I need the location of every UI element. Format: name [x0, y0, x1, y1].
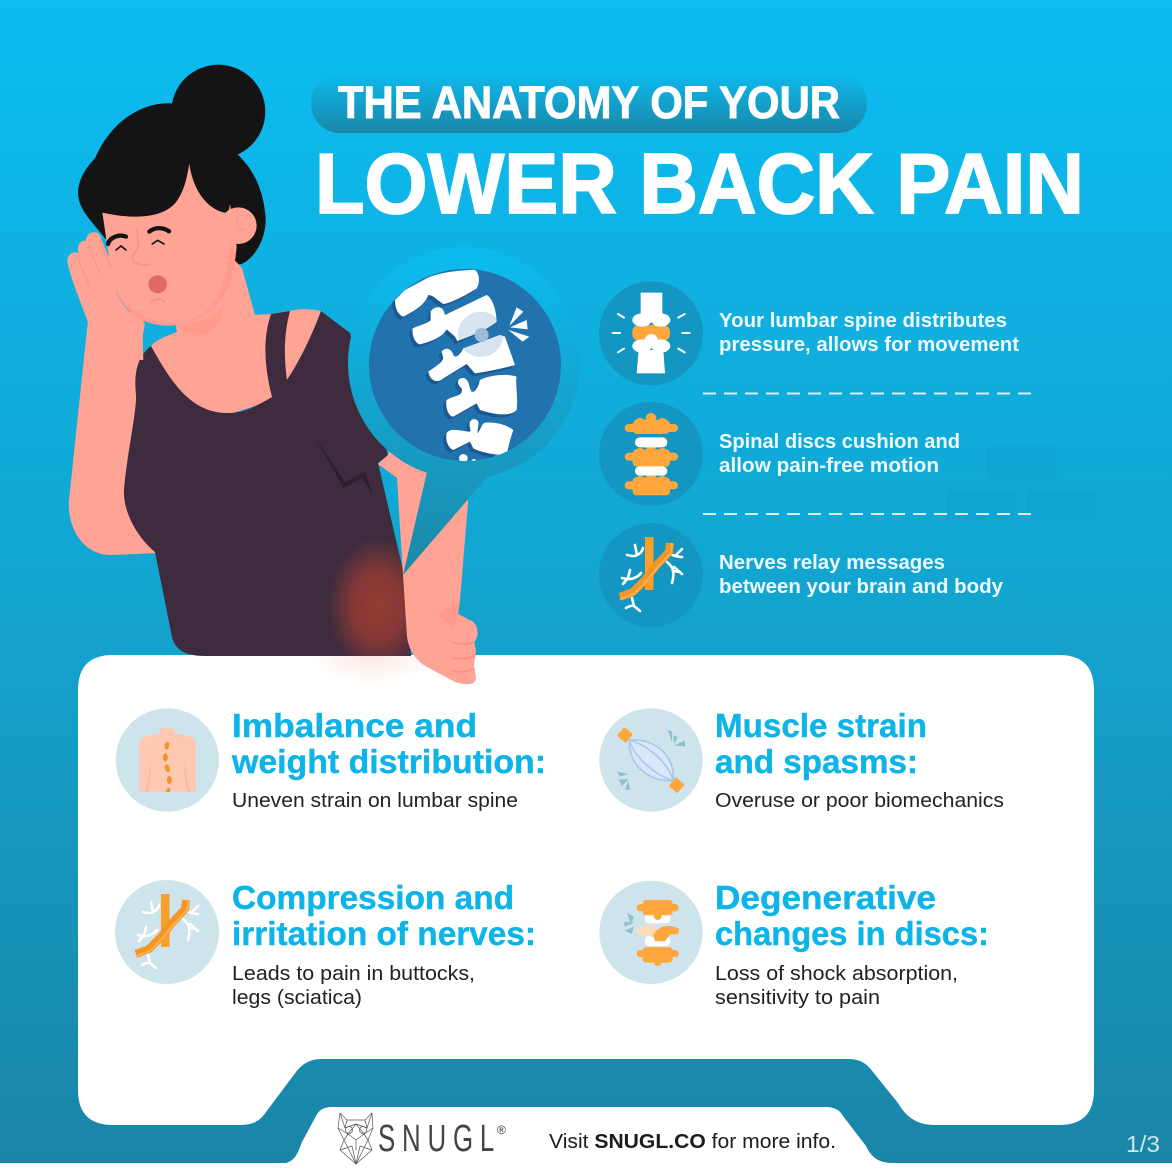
hair: [78, 65, 266, 273]
text: Leads to pain in buttocks,: [232, 962, 475, 985]
text: Uneven strain on lumbar spine: [232, 789, 518, 812]
fact: spinal discs: [599, 402, 960, 506]
heading: Imbalance and: [232, 707, 477, 744]
panel: white causes card: [78, 655, 1094, 1125]
magnifier callout: [348, 247, 580, 575]
faint background rectangles: [946, 447, 1096, 521]
heading: Degenerative: [715, 879, 936, 916]
heading: Compression and: [232, 879, 514, 916]
title pill: [311, 74, 867, 133]
footer text: Visit SNUGL.CO for more info.: [549, 1131, 836, 1153]
fist details: [437, 600, 475, 672]
icon: muscle: [599, 708, 703, 812]
logo: wordmark: SNUGL: [378, 1117, 501, 1159]
text: pressure, allows for movement: [719, 334, 1019, 356]
heading: and spasms:: [715, 743, 918, 780]
magnifier inner circle: [369, 269, 561, 461]
illustration: woman holding her back: [67, 65, 478, 685]
fact: nerves: [599, 523, 1004, 627]
icon: nerve: [599, 523, 703, 627]
raised left arm: [69, 310, 160, 555]
tank top: [124, 311, 411, 656]
text: Overuse or poor biomechanics: [715, 789, 1004, 812]
magnifier ring and pointer: [348, 247, 580, 575]
icon: joint: [599, 281, 703, 385]
pain rays: [508, 307, 529, 342]
divider: [703, 394, 1031, 514]
cause: imbalance: [116, 707, 546, 812]
head and hand: [67, 163, 257, 360]
heading: weight distribution:: [231, 743, 546, 780]
text: Nerves relay messages: [719, 552, 945, 574]
back pain glow: [331, 542, 410, 656]
icon: nerve: [115, 880, 219, 984]
logo: registered mark: ®: [497, 1123, 506, 1137]
text: Spinal discs cushion and: [719, 431, 960, 453]
icon: spine: [599, 402, 703, 506]
text: between your brain and body: [719, 576, 1004, 598]
heading: Muscle strain: [715, 707, 927, 744]
text: sensitivity to pain: [715, 986, 880, 1009]
glow on card: [328, 656, 416, 676]
neck and chest: [151, 250, 321, 415]
text: Your lumbar spine distributes: [719, 310, 1007, 332]
text: allow pain-free motion: [719, 455, 939, 477]
title line 1: THE ANATOMY OF YOUR: [338, 77, 840, 128]
text: legs (sciatica): [232, 986, 362, 1009]
pain bolt on shirt: [315, 437, 373, 495]
fact: lumbar spine: [599, 281, 1019, 385]
footer tab: [286, 1107, 890, 1163]
right arm and fist: [378, 400, 478, 684]
heading: irritation of nerves:: [232, 915, 536, 952]
cause: muscle strain: [599, 707, 1004, 812]
page number: 1/3: [1126, 1131, 1160, 1157]
logo: owl mark: [338, 1113, 373, 1164]
icon: back: [116, 708, 219, 812]
title line 2: LOWER BACK PAIN: [315, 137, 1084, 232]
heading: changes in discs:: [715, 915, 989, 952]
cause: nerve compression: [115, 879, 536, 1009]
icon: damaged spine: [599, 881, 703, 984]
cause: disc degeneration: [599, 879, 989, 1009]
spine bones: [392, 270, 517, 464]
text: Loss of shock absorption,: [715, 962, 958, 985]
